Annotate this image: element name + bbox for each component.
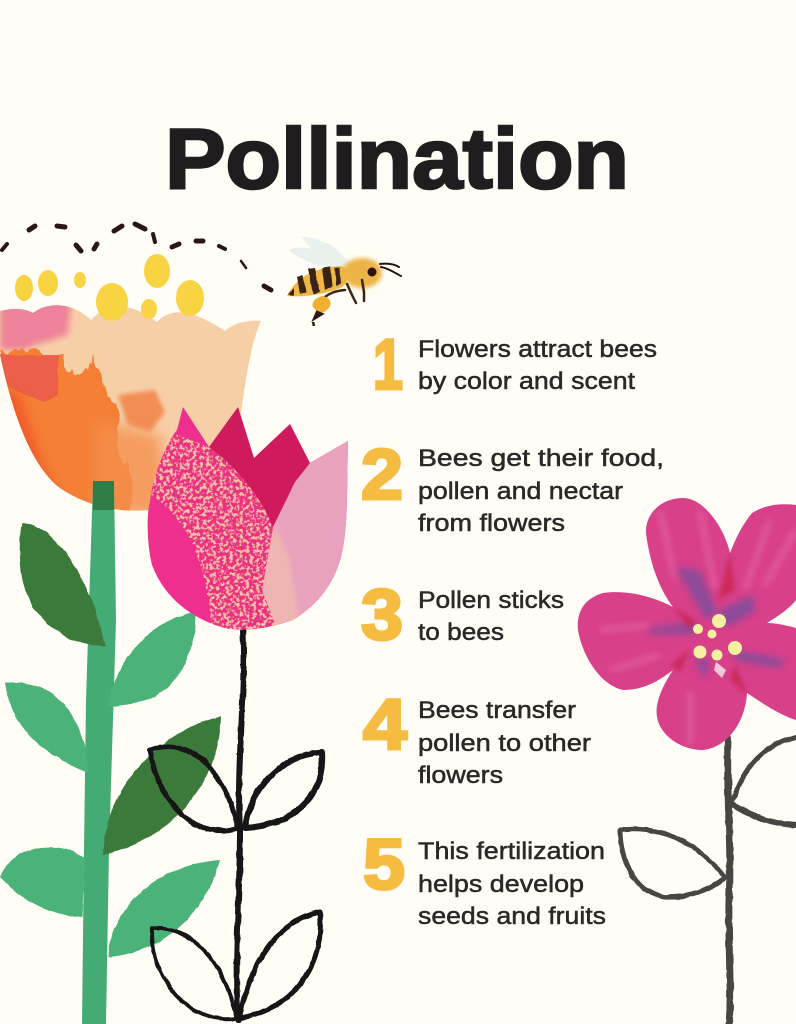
black ink stem and leaves — [150, 632, 322, 1020]
step 5: 5 — [363, 826, 405, 905]
numbered steps — [361, 326, 664, 930]
step 1: Flowers attract bees — [418, 336, 657, 363]
step 3: to bees — [418, 619, 504, 646]
title: Pollination — [165, 112, 629, 207]
step 4: flowers — [418, 762, 503, 789]
flight path dashes — [2, 224, 271, 290]
bee — [287, 236, 401, 326]
pink flower — [570, 490, 796, 760]
leaf: lower left — [0, 847, 85, 917]
step 5: seeds and fruits — [418, 903, 606, 930]
step 4 — [363, 686, 591, 789]
bee thorax and head — [342, 258, 382, 288]
bee pollen sac — [313, 296, 331, 312]
green stem — [82, 481, 116, 1024]
leaf: upper left dark — [20, 523, 105, 647]
leaf: middle left — [5, 682, 88, 772]
step 3 — [361, 576, 564, 655]
step 1: 1 — [373, 326, 403, 405]
step 1 — [373, 326, 657, 405]
leaf: middle right dark — [103, 716, 221, 855]
leaf: upper right — [108, 612, 196, 707]
step 1: by color and scent — [418, 368, 635, 395]
step 3: 3 — [361, 576, 403, 655]
bee stripes — [288, 267, 341, 296]
bee legs — [325, 280, 364, 303]
grey ink stem and leaves — [620, 737, 796, 1024]
leaf: lower right — [108, 860, 220, 957]
step 5: helps develop — [418, 871, 584, 898]
pollen dots — [15, 254, 204, 321]
bee abdomen — [287, 266, 348, 296]
step 2: Bees get their food, — [418, 445, 664, 472]
step 5 — [363, 826, 606, 930]
bee wings — [289, 236, 350, 270]
step 5: This fertilization — [418, 838, 605, 865]
step 2: pollen and nectar — [418, 478, 623, 505]
flower stamens — [693, 614, 742, 660]
step 2 — [361, 436, 664, 537]
step 2: from flowers — [418, 510, 565, 537]
pink tulip — [148, 407, 348, 630]
step 2: 2 — [361, 436, 403, 515]
flower petals — [570, 490, 796, 760]
step 3: Pollen sticks — [418, 587, 564, 614]
green leaves — [0, 523, 221, 957]
bee eye — [368, 268, 376, 276]
bee antennae — [380, 264, 401, 276]
step 4: Bees transfer — [418, 697, 576, 724]
orange tulip — [0, 295, 265, 515]
step 4: 4 — [363, 686, 408, 765]
stem overlap — [93, 481, 114, 510]
step 4: pollen to other — [418, 730, 591, 757]
